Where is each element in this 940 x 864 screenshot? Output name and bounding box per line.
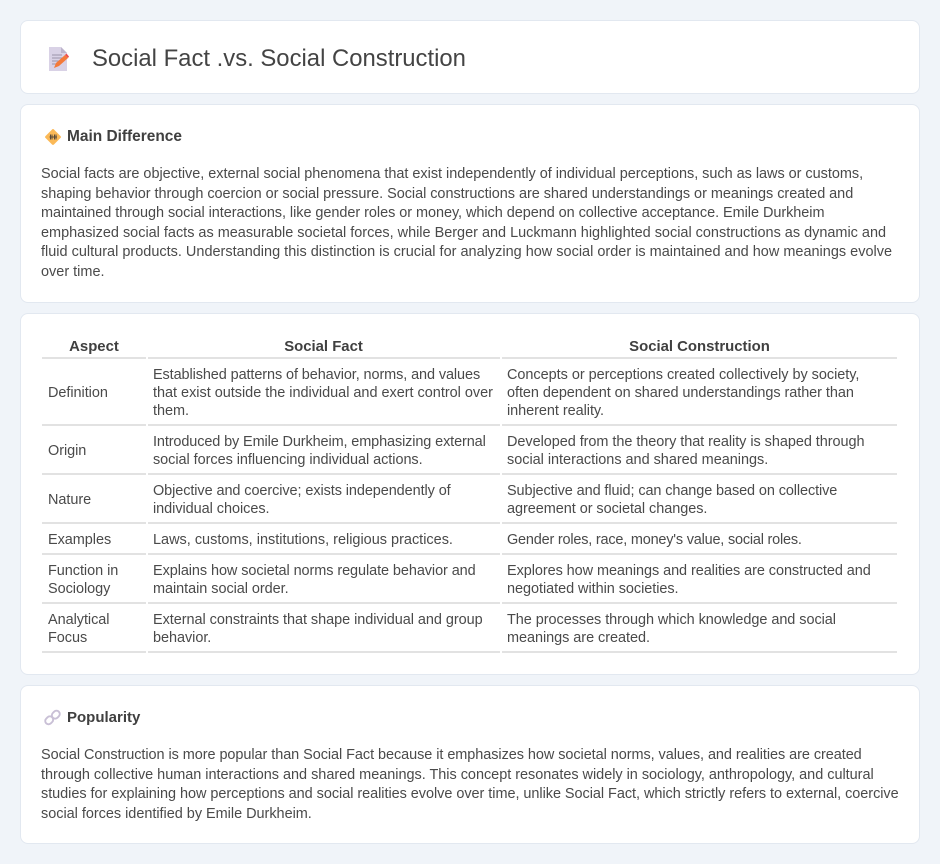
origin: social fact xyxy=(153,434,486,468)
analytical focus: social construction xyxy=(507,612,836,646)
text: popularity paragraph: through collective human interactions and shared meanings. This concept resonates widely in sociology, anthropology, and cultural xyxy=(41,766,874,782)
nature: social construction: Subjective and fluid; can change based on collective xyxy=(507,483,837,499)
examples: social fact: Laws, customs, institutions, religious practices. xyxy=(153,532,453,548)
text: main difference paragraph: fluid cultural products. Understanding this distinction is crucial for analyzing how social order is maintained and how meanings evolve xyxy=(41,244,892,260)
origin: social fact: Introduced by Emile Durkheim, emphasizing external xyxy=(153,434,486,450)
row label: function in sociology: Sociology xyxy=(48,581,110,597)
nature: social construction: agreement or societal changes. xyxy=(507,501,707,517)
definition: social fact: them. xyxy=(153,403,189,419)
function: social fact xyxy=(153,563,476,597)
row label: origin: Origin xyxy=(48,443,86,459)
row label: nature: Nature xyxy=(48,492,91,508)
definition: social fact: Established patterns of behavior, norms, and values xyxy=(153,367,480,383)
text: main difference paragraph: emphasized social facts as measurable societal forces, while Berger and Luckmann highlighted social constructions as dynamic and xyxy=(41,224,886,240)
text: main difference paragraph xyxy=(41,166,892,280)
definition: social fact xyxy=(153,367,493,419)
text: main difference paragraph: maintained through social interactions, like gender roles or money, which depend on collective acceptance. Emile Durkheim xyxy=(41,205,824,221)
analytical focus: social fact: behavior. xyxy=(153,630,211,646)
panel: comparison table xyxy=(20,313,920,675)
text: popularity paragraph: Social Construction is more popular than Social Fact because it emphasizes how societal norms, values, and realities are created xyxy=(41,747,862,763)
definition: social construction: inherent reality. xyxy=(507,403,604,419)
heading: main difference: Main Difference xyxy=(67,128,182,145)
panel: popularity xyxy=(20,685,920,844)
nature: social fact xyxy=(153,483,451,517)
origin: social construction xyxy=(507,434,865,468)
analytical focus: social construction: The processes through which knowledge and social xyxy=(507,612,836,628)
icon: document with pencil xyxy=(49,47,69,71)
nature: social construction xyxy=(507,483,837,517)
row label: function in sociology xyxy=(48,563,118,597)
analytical focus: social fact: External constraints that shape individual and group xyxy=(153,612,483,628)
function: social construction: negotiated within societies. xyxy=(507,581,679,597)
row label: examples: Examples xyxy=(48,532,111,548)
nature: social fact: Objective and coercive; exists independently of xyxy=(153,483,451,499)
origin: social fact: social forces influencing individual actions. xyxy=(153,452,423,468)
definition: social fact: that exist outside the individual and exert control over xyxy=(153,385,493,401)
row label: analytical focus: Analytical xyxy=(48,612,109,628)
analytical focus: social fact xyxy=(153,612,483,646)
text: main difference paragraph: over time. xyxy=(41,264,105,280)
row label: function in sociology: Function in xyxy=(48,563,118,579)
definition: social construction xyxy=(507,367,859,419)
examples: social construction: Gender roles, race, money's value, social roles. xyxy=(507,532,802,548)
definition: social construction: often dependent on shared understandings rather than xyxy=(507,385,854,401)
origin: social construction: Developed from the theory that reality is shaped through xyxy=(507,434,865,450)
table header: aspect: Aspect xyxy=(69,339,119,355)
definition: social construction: Concepts or perceptions created collectively by society, xyxy=(507,367,859,383)
text: main difference paragraph: shaping behavior through coercion or social pressure. Social constructions are shared understandings or meanings created and xyxy=(41,186,853,202)
row label: definition: Definition xyxy=(48,385,108,401)
icon: chain link xyxy=(44,710,61,726)
title: Social Fact .vs. Social Construction xyxy=(92,45,466,72)
analytical focus: social construction: meanings are created. xyxy=(507,630,650,646)
panel: main difference xyxy=(20,104,920,303)
function: social construction: Explores how meanings and realities are constructed and xyxy=(507,563,871,579)
text: main difference paragraph: Social facts are objective, external social phenomena that exist independently of individual perceptions, such as laws or customs, xyxy=(41,166,863,182)
table header: social construction: Social Construction xyxy=(629,339,770,355)
text: popularity paragraph: social forces identified by Emile Durkheim. xyxy=(41,806,312,822)
table header: social fact: Social Fact xyxy=(284,339,363,355)
text: popularity paragraph: studies for explaining how perceptions and social realities evolve over time, unlike Social Fact, which strictly refers to external, coercive xyxy=(41,786,899,802)
heading: popularity: Popularity xyxy=(67,709,140,726)
row label: analytical focus: Focus xyxy=(48,630,87,646)
function: social fact: Explains how societal norms regulate behavior and xyxy=(153,563,476,579)
row label: analytical focus xyxy=(48,612,109,646)
origin: social construction: social interactions and shared meanings. xyxy=(507,452,768,468)
panel: title card xyxy=(20,20,920,94)
icon: warning diamond xyxy=(45,129,61,145)
function: social construction xyxy=(507,563,871,597)
function: social fact: maintain social order. xyxy=(153,581,289,597)
nature: social fact: individual choices. xyxy=(153,501,269,517)
text: popularity paragraph xyxy=(41,747,899,822)
